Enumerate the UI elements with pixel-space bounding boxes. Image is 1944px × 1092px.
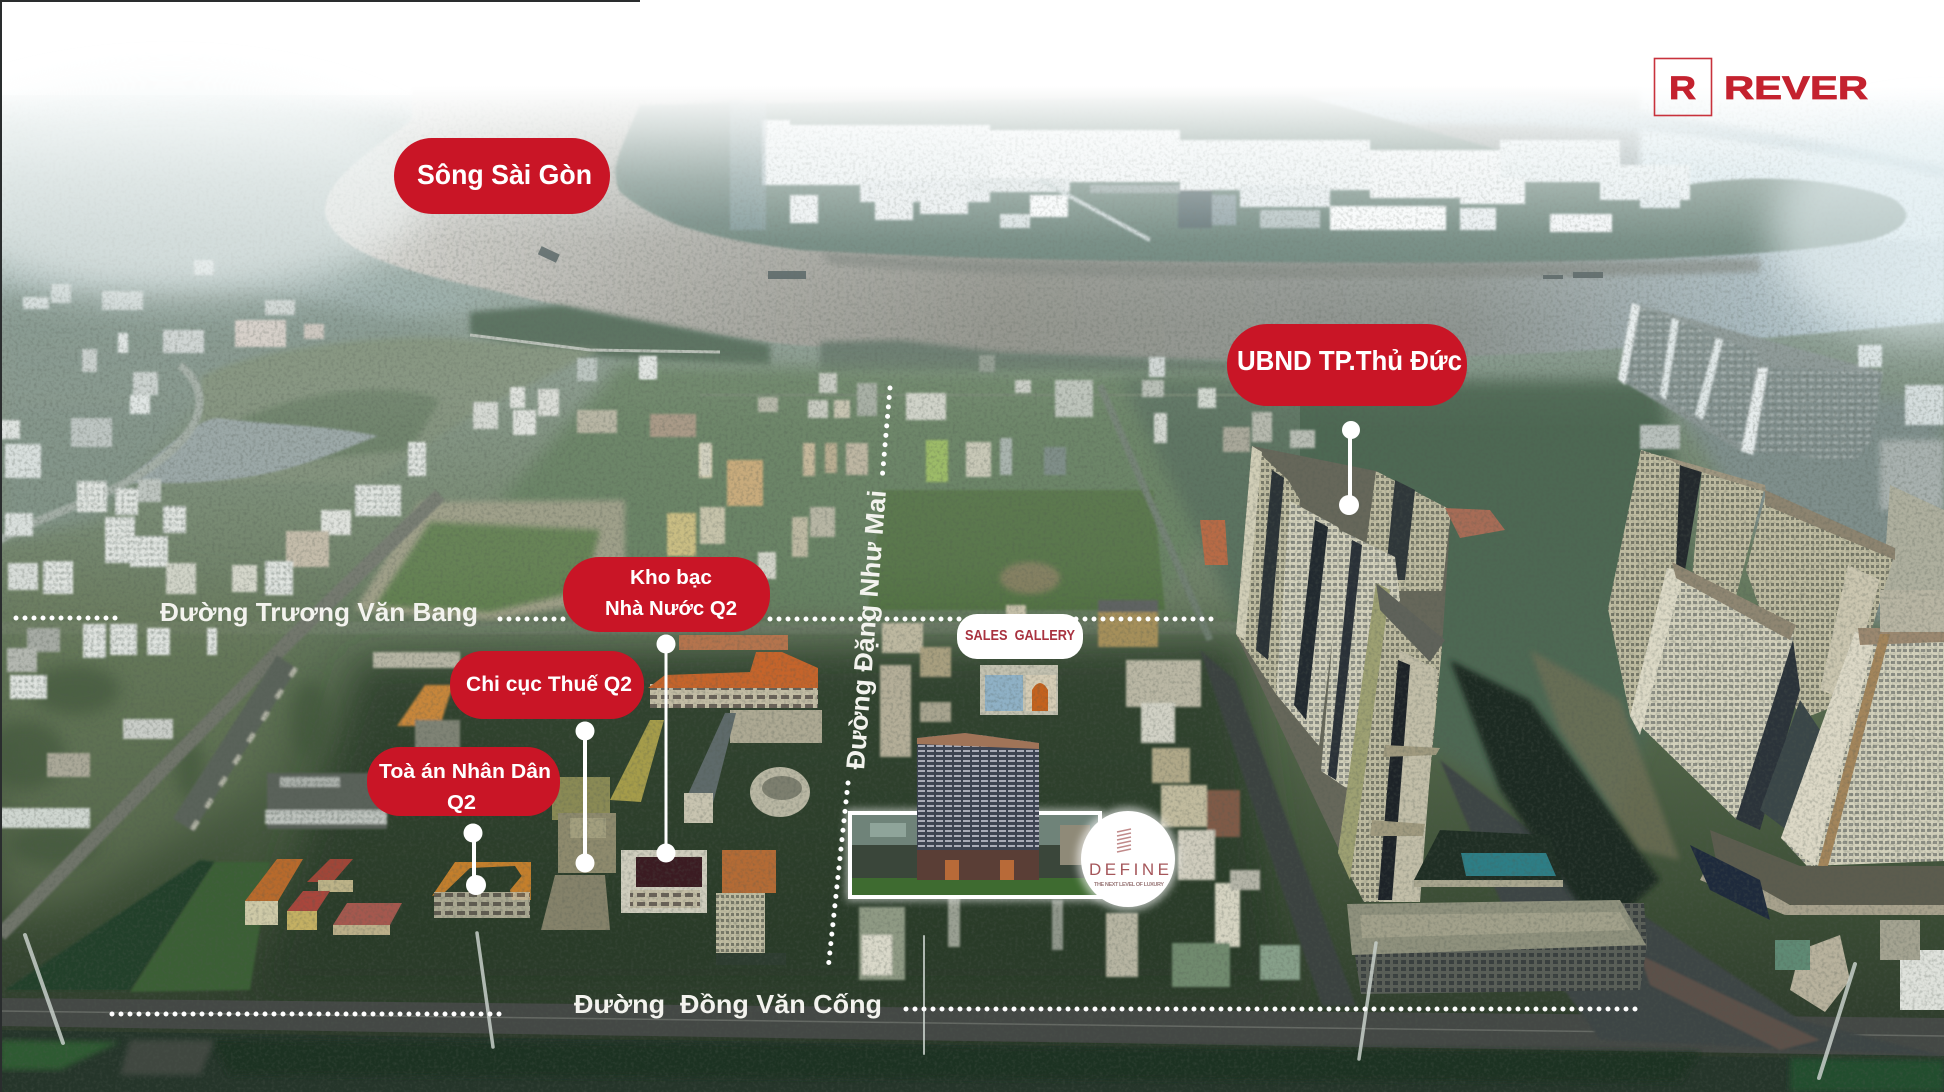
Define project billboard [846, 733, 1102, 901]
pill: Song Sai Gon [394, 138, 610, 214]
left side haze [0, 85, 430, 295]
opposite bank land [616, 95, 1906, 263]
marsh green patch [230, 390, 440, 460]
north-south road east [1100, 385, 1210, 640]
top white haze [0, 0, 1944, 430]
right bottom round building [1775, 920, 1944, 1012]
pill: Chi cuc Thue Q2: Chi cục Thuế Q2 [466, 673, 632, 696]
beige government building [541, 813, 616, 930]
left hazy peninsula [0, 107, 500, 340]
Define logo badge: THE NEXT LEVEL OF LUXURY [1094, 882, 1164, 888]
pill: Kho bac Nha Nuoc Q2 [563, 557, 770, 632]
connector: Chi cuc Thue [576, 722, 594, 872]
riverside dark trees [470, 305, 770, 365]
Define logo badge [1077, 807, 1179, 911]
left tree clumps [0, 665, 330, 867]
pill: UBND TP Thu Duc: UBND TP.Thủ Đức [1237, 345, 1462, 376]
pill: Kho bac Nha Nuoc Q2: Nhà Nước Q2 [605, 597, 737, 620]
road row Truong Van Bang [0, 622, 1240, 634]
bottom main road [0, 998, 1944, 1056]
dark tree belt between towers [1450, 660, 1660, 935]
pill: Toa an Nhan Dan Q2: Toà án Nhân Dân [379, 760, 551, 783]
Rever logo: REVER [1724, 70, 1868, 106]
Rever logo: R [1669, 70, 1696, 106]
road label: Duong Dong Van Cong: Đường Đồng Văn Cống [574, 989, 882, 1019]
distant right water band and island [1290, 60, 1944, 240]
road label: Duong Dang Nhu Mai: Đường Đặng Như Mai [840, 489, 892, 770]
Rever logo [1654, 58, 1868, 116]
sandy green field [355, 500, 625, 620]
centre green field [868, 490, 1165, 610]
central east blocks [859, 600, 1300, 987]
lower row roofs west [245, 859, 402, 935]
connector: Toa an [464, 824, 486, 895]
pill: Toa an Nhan Dan Q2: Q2 [447, 791, 476, 814]
road label: Duong Truong Van Bang: Đường Trương Văn Bang [160, 597, 478, 627]
project tower [917, 733, 1039, 880]
left lighter lot tones [0, 560, 300, 920]
industrial zone across the river [730, 100, 1690, 240]
low rise apartment block [1347, 900, 1647, 994]
pill: Kho bac Nha Nuoc Q2: Kho bạc [630, 566, 712, 589]
toa an building [432, 862, 531, 918]
dark tree strip along bottom [0, 1030, 1944, 1092]
field sand spot [1000, 562, 1060, 594]
left diagonal road [0, 495, 440, 935]
mid villas and shophouses [640, 355, 1315, 617]
west side road beside towers [1200, 650, 1356, 1006]
connector: UBND [1339, 421, 1360, 515]
sales gallery building [980, 665, 1058, 715]
east side ground [1120, 380, 1700, 850]
terrace villas [183, 652, 460, 830]
define stacked lines icon [1117, 829, 1131, 852]
marsh field [160, 337, 600, 482]
dotted road: Truong Van Bang [16, 618, 1212, 619]
pill: Sales Gallery: SALES GALLERY [965, 628, 1075, 644]
grey wash over mid ground [0, 280, 1300, 660]
right big towers [1608, 450, 1944, 920]
lower right plaza road [1440, 760, 1944, 1056]
pill: Sales Gallery [957, 614, 1083, 659]
pill: UBND TP Thu Duc [1227, 324, 1467, 406]
lower-left green fields [5, 860, 215, 990]
central dark vegetation [250, 640, 1290, 1000]
Define logo badge: DEFINE [1089, 860, 1169, 879]
orange school buildings [552, 635, 822, 823]
left villas haze zone tones [0, 290, 470, 540]
mid land tones [500, 365, 1240, 610]
street light poles [25, 933, 1855, 1078]
image edge lines [0, 0, 640, 1092]
tennis podium [1414, 830, 1563, 887]
Saigon river [325, 60, 1944, 360]
pill: Chi cuc Thue Q2 [450, 651, 644, 719]
right side haze [1770, 120, 1944, 340]
river reflection shadow [820, 252, 1760, 278]
back right towers [1618, 303, 1944, 510]
connector: Kho bac [656, 634, 676, 862]
barges on the river [538, 246, 1603, 279]
clubhouse orange roofs east of tower [1200, 508, 1505, 565]
tall orange roof block [716, 850, 786, 965]
front towers [1236, 446, 1451, 902]
curved road on left [0, 365, 200, 540]
pill: Song Sai Gon: Sông Sài Gòn [417, 159, 592, 190]
pill: Toa an Nhan Dan Q2 [367, 747, 560, 816]
dotted road: Dang Nhu Mai [828, 388, 890, 970]
kho bac building [621, 850, 707, 913]
pond [120, 418, 378, 483]
far left villas [0, 260, 776, 828]
dotted road: Dong Van Cong [112, 1009, 1637, 1014]
